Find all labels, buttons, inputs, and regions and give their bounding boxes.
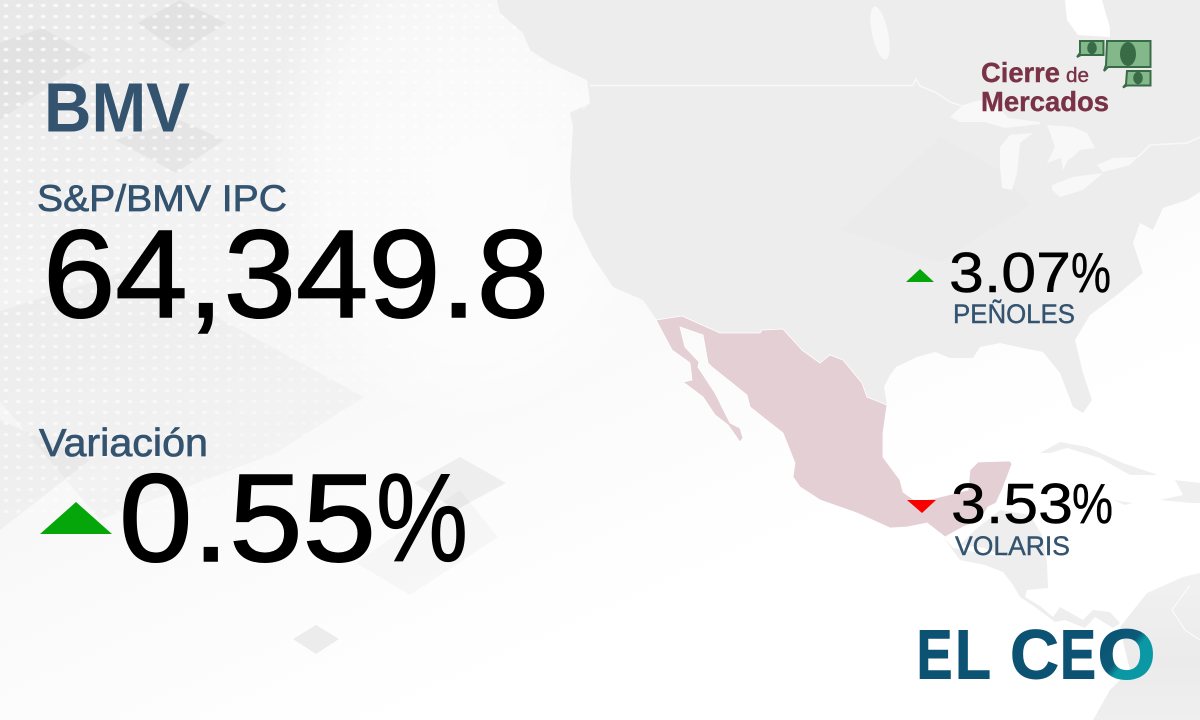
loser value: 3.53 xyxy=(951,472,1073,536)
Caribbean islands xyxy=(1040,442,1158,475)
icon: small green up arrow xyxy=(906,269,934,282)
logo: EL CEO: C xyxy=(1010,616,1059,694)
gainer value xyxy=(949,241,1111,305)
brand: Cierre de Mercados xyxy=(981,41,1150,117)
brand text: de xyxy=(1066,65,1089,87)
gainer name: PEÑOLES xyxy=(953,298,1075,329)
map: North America xyxy=(497,0,1200,720)
map: Mexico xyxy=(656,316,1012,537)
lake: Ontario xyxy=(1097,157,1138,172)
loser value xyxy=(951,472,1113,536)
brand text: Cierre xyxy=(981,57,1060,88)
logo: EL CEO xyxy=(916,616,1155,694)
lake: Huron xyxy=(1047,125,1095,170)
variation value xyxy=(119,449,468,588)
panel: top gainer Peñoles xyxy=(906,241,1111,329)
United States and Canada landmass xyxy=(497,0,1200,413)
variation value: % xyxy=(376,449,468,588)
heading: BMV: BMV xyxy=(44,68,190,146)
gainer value: 3.07 xyxy=(949,241,1071,305)
lake: Michigan xyxy=(1000,133,1033,190)
South America xyxy=(1093,573,1200,720)
brand text: Mercados xyxy=(981,86,1109,117)
panel: top loser Volaris xyxy=(907,472,1113,561)
icon: money speech bubbles xyxy=(1077,41,1150,88)
loser name: VOLARIS xyxy=(955,531,1070,561)
lake: Erie xyxy=(1052,173,1103,197)
Central America xyxy=(943,510,1120,628)
lake: Great Bear xyxy=(867,5,893,61)
background xyxy=(0,0,506,654)
gainer value: % xyxy=(1071,241,1111,305)
variation value: 0.55 xyxy=(119,449,376,588)
lake: Superior xyxy=(950,100,1040,128)
logo: EL CEO: L xyxy=(955,616,991,694)
icon: small red down arrow xyxy=(907,500,936,513)
Hudson Bay xyxy=(1065,0,1110,37)
index value: 64,349.8 xyxy=(43,205,549,344)
brand text xyxy=(981,57,1109,117)
label: S&amp;P/BMV IPC: S&P/BMV IPC xyxy=(37,178,287,219)
label: Variación: Variación xyxy=(39,422,208,465)
logo: EL CEO: E xyxy=(1060,616,1096,694)
logo: EL CEO: E xyxy=(916,616,952,694)
icon: large green up arrow xyxy=(40,502,112,534)
loser value: % xyxy=(1072,472,1113,536)
logo: EL CEO: O xyxy=(1098,616,1155,694)
